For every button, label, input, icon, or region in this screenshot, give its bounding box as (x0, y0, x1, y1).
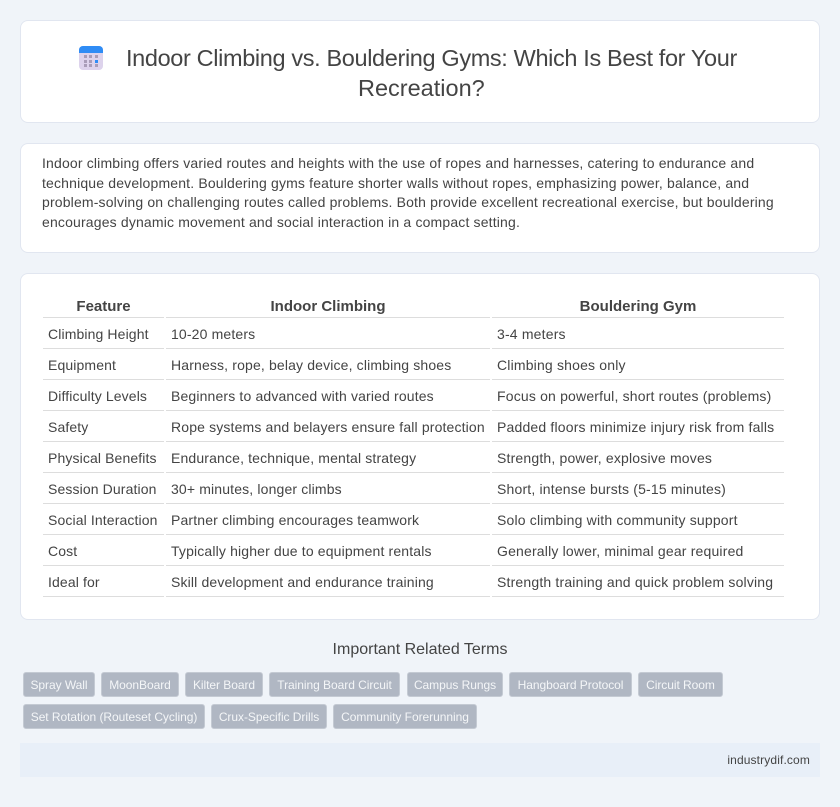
tag (23, 672, 95, 697)
tag (333, 704, 477, 729)
title: Recreation? (358, 75, 485, 101)
comparison table: Indoor Climbing (270, 298, 385, 315)
tag (509, 672, 632, 697)
intro text (42, 155, 774, 230)
comparison table: Equipment (48, 357, 116, 373)
tag: MoonBoard (109, 678, 171, 692)
title: Indoor Climbing vs. Bouldering Gyms: Which Is Best for Your (126, 45, 737, 71)
comparison table: Solo climbing with community support (497, 512, 738, 528)
comparison table: 10-20 meters (171, 326, 255, 342)
comparison table: Endurance, technique, mental strategy (171, 450, 416, 466)
icon: calendar (79, 46, 103, 70)
comparison table: Difficulty Levels (48, 388, 147, 404)
tag (211, 704, 327, 729)
comparison table: Short, intense bursts (5-15 minutes) (497, 481, 726, 497)
tag: Crux-Specific Drills (219, 710, 319, 724)
related term tags (23, 672, 723, 729)
comparison table: Generally lower, minimal gear required (497, 543, 744, 559)
comparison table: Climbing Height (48, 326, 149, 342)
comparison table: Cost (48, 543, 77, 559)
comparison table: Padded floors minimize injury risk from falls (497, 419, 774, 435)
tag (638, 672, 723, 697)
tag (407, 672, 503, 697)
intro text: Indoor climbing offers varied routes and heights with the use of ropes and harnesses, catering to endurance and (42, 155, 754, 171)
comparison table: Typically higher due to equipment rentals (171, 543, 432, 559)
header panel (20, 20, 820, 123)
tag (101, 672, 179, 697)
comparison table: Session Duration (48, 481, 157, 497)
comparison table: Physical Benefits (48, 450, 157, 466)
tag (269, 672, 400, 697)
tag (185, 672, 263, 697)
tag: Training Board Circuit (277, 678, 392, 692)
intro text: problem-solving on challenging routes called problems. Both provide excellent recreational exercise, but bouldering (42, 194, 774, 210)
table panel (20, 273, 820, 620)
title (126, 45, 737, 101)
tag: Community Forerunning (341, 710, 469, 724)
intro panel (20, 143, 820, 253)
comparison table: Harness, rope, belay device, climbing shoes (171, 357, 451, 373)
tag: Kilter Board (193, 678, 255, 692)
comparison table: Bouldering Gym (580, 298, 696, 315)
comparison table: 3-4 meters (497, 326, 566, 342)
tag: Campus Rungs (414, 678, 496, 692)
intro text: technique development. Bouldering gyms feature shorter walls without ropes, emphasizing power, balance, and (42, 175, 749, 191)
comparison table: Partner climbing encourages teamwork (171, 512, 419, 528)
comparison table: Skill development and endurance training (171, 574, 434, 590)
intro text: encourages dynamic movement and social interaction in a compact setting. (42, 214, 520, 230)
tag: Set Rotation (Routeset Cycling) (31, 710, 197, 724)
comparison table: Strength, power, explosive moves (497, 450, 712, 466)
footer source: industrydif.com (727, 753, 810, 767)
comparison table: Safety (48, 419, 88, 435)
related terms heading: Important Related Terms (333, 641, 507, 658)
tag: Circuit Room (646, 678, 715, 692)
tag (23, 704, 205, 729)
comparison table: Feature (76, 298, 131, 315)
comparison table: Ideal for (48, 574, 100, 590)
comparison table: Climbing shoes only (497, 357, 626, 373)
tag: Spray Wall (30, 678, 88, 692)
comparison table: Beginners to advanced with varied routes (171, 388, 434, 404)
comparison table: Rope systems and belayers ensure fall protection (171, 419, 485, 435)
comparison table: 30+ minutes, longer climbs (171, 481, 342, 497)
tag: Hangboard Protocol (518, 678, 623, 692)
comparison table: Focus on powerful, short routes (problems) (497, 388, 771, 404)
comparison table (43, 298, 784, 597)
footer bar (20, 743, 820, 777)
comparison table: Social Interaction (48, 512, 158, 528)
comparison table: Strength training and quick problem solving (497, 574, 773, 590)
